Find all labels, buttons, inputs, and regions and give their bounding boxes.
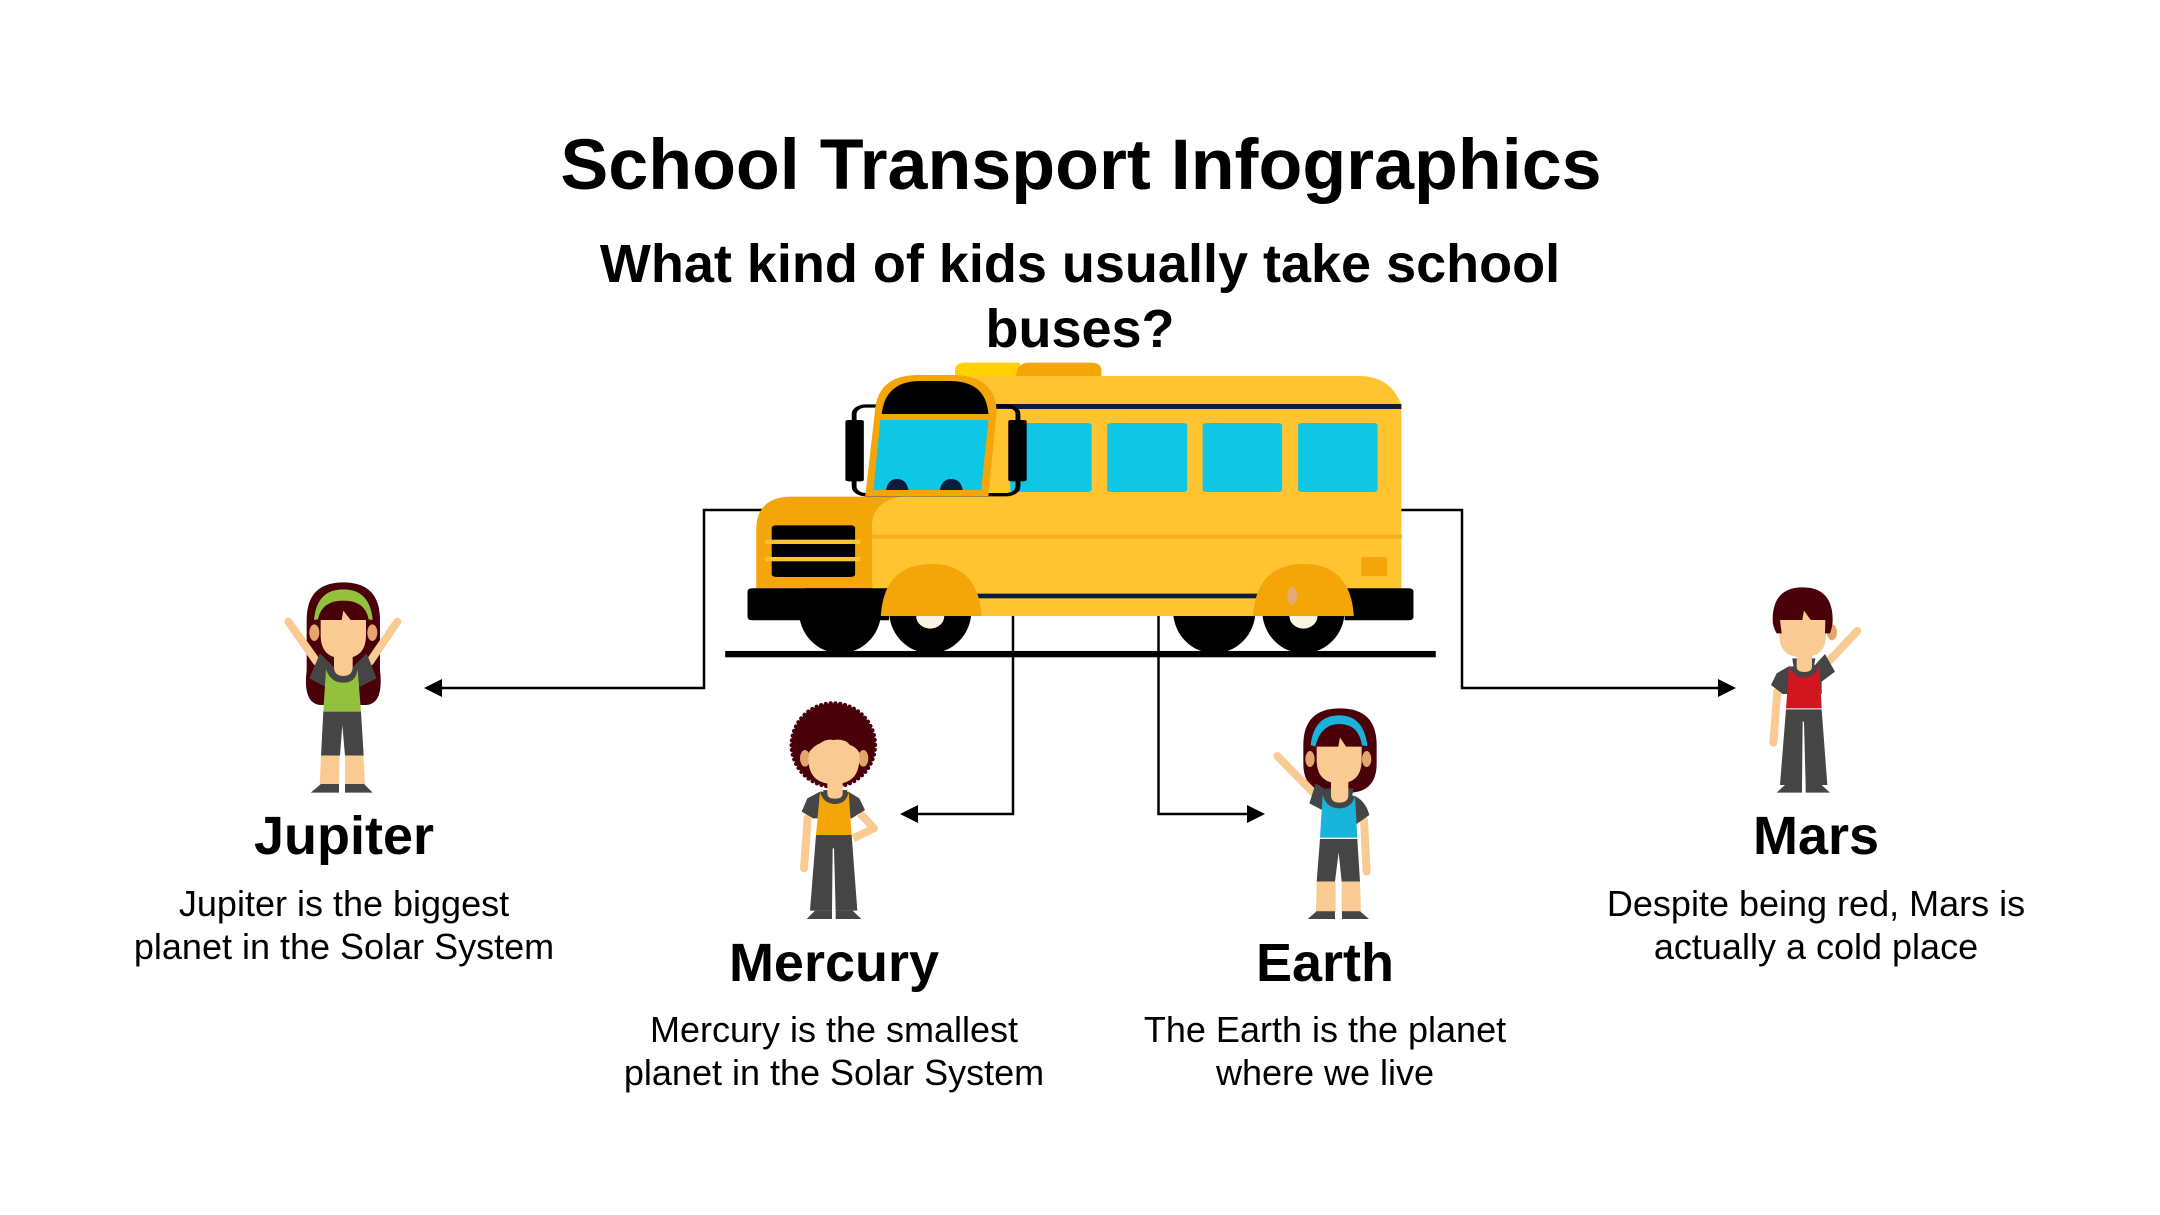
subtitle: What kind of kids usually take school [600, 234, 1560, 294]
mirror arms [854, 406, 1018, 495]
arrow: bus to Jupiter [424, 510, 770, 697]
description: Jupiter [134, 883, 554, 967]
subtitle: buses? [985, 299, 1175, 359]
description: Earth: The Earth is the planet [1144, 1009, 1506, 1050]
wheel arches [881, 564, 1354, 616]
description: Mars: Despite being red, Mars is [1607, 883, 2025, 924]
hood [756, 497, 904, 588]
arrow: bus to Mercury [900, 610, 1013, 823]
road line [725, 651, 1436, 657]
description: Mercury [624, 1009, 1044, 1093]
roof stripe [991, 404, 1401, 409]
body trim [872, 535, 1402, 598]
description: Jupiter: Jupiter is the biggest [179, 883, 509, 924]
label: Jupiter: Jupiter [254, 806, 434, 866]
side mirrors [845, 420, 1027, 481]
wheels [799, 568, 1345, 653]
character: Earth [1277, 708, 1377, 919]
side windows [1010, 423, 1378, 492]
subtitle [600, 234, 1560, 359]
character: Mercury [792, 703, 875, 919]
title: School Transport Infographics [560, 125, 1602, 205]
arrow: bus to Earth [1158, 610, 1265, 823]
bus body [872, 376, 1401, 616]
chassis [748, 588, 1413, 620]
description: Mars [1607, 883, 2025, 967]
description: Jupiter: planet in the Solar System [134, 926, 554, 967]
arrow: bus to Mars [1400, 510, 1736, 697]
description: Earth: where we live [1215, 1052, 1434, 1093]
label: Mars: Mars [1753, 806, 1879, 866]
label: Mercury: Mercury [729, 933, 939, 993]
description: Earth [1144, 1009, 1506, 1093]
character: Mars [1771, 587, 1857, 793]
school bus illustration [725, 363, 1436, 657]
grille [765, 525, 860, 577]
label: Earth: Earth [1256, 933, 1394, 993]
description: Mercury: planet in the Solar System [624, 1052, 1044, 1093]
description: Mars: actually a cold place [1654, 926, 1978, 967]
description: Mercury: Mercury is the smallest [650, 1009, 1018, 1050]
windshield [865, 375, 997, 496]
roof light [955, 363, 1101, 377]
character: Jupiter [288, 582, 397, 793]
